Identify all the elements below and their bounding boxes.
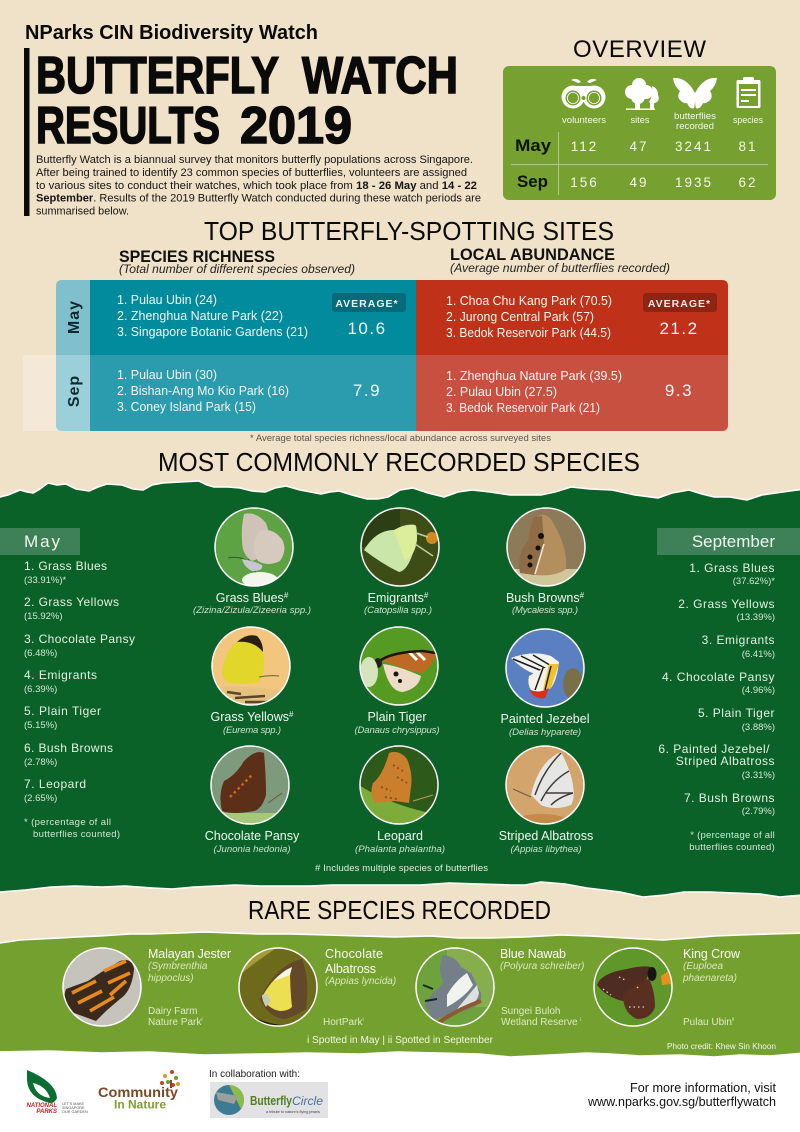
September list bbox=[657, 528, 800, 853]
rare species: Malayan Jester: (Symbrenthia bbox=[148, 961, 208, 972]
panel: top sites table bbox=[23, 280, 728, 431]
species card: Chocolate Pansy bbox=[205, 745, 300, 855]
species footnote: # Includes multiple species of butterflies bbox=[315, 863, 488, 874]
species card: Leopard: (Phalanta phalantha) bbox=[355, 844, 445, 855]
rare species: Malayan Jester: Malayan Jester bbox=[148, 947, 231, 961]
rare species: Chocolate Albatross: Chocolate bbox=[325, 947, 383, 961]
overview heading: OVERVIEW bbox=[573, 36, 706, 63]
September list: (3.31%) bbox=[742, 770, 775, 781]
species card: Leopard: Leopard bbox=[377, 829, 423, 843]
species card: Bush Browns bbox=[506, 507, 586, 616]
May list: May bbox=[24, 532, 60, 551]
species card: Emigrants: (Catopsilia spp.) bbox=[364, 605, 432, 616]
heading: rare species: RARE SPECIES RECORDED bbox=[248, 895, 551, 925]
column heading: species richness: SPECIES RICHNESS bbox=[119, 248, 275, 266]
column labels bbox=[562, 111, 763, 132]
main title: WATCH bbox=[302, 47, 458, 105]
month label: May: May bbox=[66, 300, 83, 334]
richness May list bbox=[117, 292, 308, 339]
logo: National Parks: LET'S MAKE bbox=[62, 1102, 85, 1106]
average values: 7.9 bbox=[353, 381, 381, 400]
abundance Sep list: 1. Zhenghua Nature Park (39.5) bbox=[446, 368, 622, 383]
May list: 2. Grass Yellows bbox=[24, 595, 119, 609]
rare species: Blue Nawab: i bbox=[580, 1017, 581, 1023]
May list: 5. Plain Tiger bbox=[24, 704, 101, 718]
main title: 2019 bbox=[240, 97, 352, 155]
logo: ButterflyCircle: a tribute to nature's flying jewels bbox=[266, 1110, 320, 1114]
row: Sep: 156 bbox=[570, 175, 599, 190]
rare species: Blue Nawab: Blue Nawab bbox=[500, 947, 566, 961]
abundance May list: 3. Bedok Reservoir Park (44.5) bbox=[446, 325, 611, 340]
species card: Plain Tiger: (Danaus chrysippus) bbox=[354, 725, 440, 736]
average badge: richness bbox=[332, 293, 406, 312]
May list: (2.78%) bbox=[24, 757, 57, 768]
September list: (3.88%) bbox=[742, 722, 775, 733]
rare species: Blue Nawab: Wetland Reserve bbox=[501, 1017, 578, 1028]
rare species: Chocolate Albatross: i bbox=[362, 1017, 364, 1023]
panel: overview bbox=[503, 66, 776, 200]
rare species: King Crow: Pulau Ubin bbox=[683, 1017, 732, 1028]
more information: For more information, visit bbox=[630, 1080, 776, 1095]
May list: (33.91%)* bbox=[24, 575, 67, 586]
column heading: species richness: (Total number of different species observed) bbox=[119, 264, 355, 276]
average values: 21.2 bbox=[659, 319, 699, 338]
species card: Emigrants: # bbox=[424, 591, 429, 600]
species card: Grass Yellows: (Eurema spp.) bbox=[223, 725, 281, 736]
rare species: Chocolate Albatross bbox=[238, 947, 396, 1028]
rare species: Chocolate Albatross: (Appias lyncida) bbox=[325, 976, 396, 987]
icon: clipboard bbox=[736, 77, 760, 108]
species card: Emigrants: Emigrants bbox=[368, 591, 424, 605]
more information: www.nparks.gov.sg/butterflywatch bbox=[587, 1094, 776, 1109]
intro paragraph bbox=[36, 154, 481, 218]
rare species: Chocolate Albatross: Albatross bbox=[325, 962, 376, 976]
logo: National Parks: NATIONAL bbox=[26, 1103, 57, 1109]
row: May: 47 bbox=[629, 139, 649, 154]
supertitle: NParks CIN Biodiversity Watch bbox=[25, 22, 318, 44]
species card: Chocolate Pansy: Chocolate Pansy bbox=[205, 829, 300, 843]
abundance Sep list bbox=[446, 368, 622, 415]
main title: RESULTS bbox=[36, 97, 220, 155]
rare species: Malayan Jester bbox=[62, 947, 231, 1028]
rare species: Malayan Jester: hippoclus) bbox=[148, 973, 194, 984]
rare species: Chocolate Albatross: HortPark bbox=[323, 1017, 362, 1028]
May list: butterflies counted) bbox=[33, 829, 120, 840]
average values: 10.6 bbox=[347, 319, 387, 338]
September list: * (percentage of all bbox=[690, 830, 775, 841]
species card: Painted Jezebel: Painted Jezebel bbox=[501, 712, 589, 726]
average values bbox=[347, 319, 699, 400]
column labels: species bbox=[733, 115, 763, 126]
logo: Community in Nature bbox=[98, 1070, 180, 1112]
heading: top sites: TOP BUTTERFLY-SPOTTING SITES bbox=[204, 216, 614, 246]
intro paragraph: September. Results of the 2019 Butterfly Watch conducted during these watch periods are bbox=[36, 192, 481, 204]
rare species: King Crow bbox=[593, 947, 741, 1028]
white footer background and rare species band bbox=[0, 932, 800, 1132]
species card: Grass Blues: Grass Blues bbox=[216, 591, 284, 605]
May list: 4. Emigrants bbox=[24, 668, 97, 682]
September list: (6.41%) bbox=[742, 649, 775, 660]
column heading: local abundance: (Average number of butterflies recorded) bbox=[450, 263, 670, 275]
species card: Plain Tiger: Plain Tiger bbox=[367, 710, 427, 724]
rare species: Blue Nawab: (Polyura schreiber) bbox=[500, 961, 584, 972]
logo: ButterflyCircle: Circle bbox=[292, 1094, 323, 1108]
species card: Grass Yellows: # bbox=[289, 710, 294, 719]
May list bbox=[0, 528, 135, 840]
May list: (5.15%) bbox=[24, 720, 57, 731]
row: Sep: 1935 bbox=[675, 175, 713, 190]
May list: (15.92%) bbox=[24, 611, 63, 622]
icon: binoculars bbox=[562, 79, 606, 108]
row: May bbox=[515, 136, 758, 155]
logo: National Parks: PARKS bbox=[36, 1109, 57, 1115]
column labels: butterflies bbox=[674, 111, 716, 122]
species card: Striped Albatross: Striped Albatross bbox=[499, 829, 593, 843]
September list: 3. Emigrants bbox=[702, 633, 775, 647]
September list: 2. Grass Yellows bbox=[678, 597, 775, 611]
May list: 1. Grass Blues bbox=[24, 559, 107, 573]
September list: (37.62%)* bbox=[733, 576, 775, 587]
species card: Grass Yellows bbox=[211, 626, 294, 736]
icon: butterfly bbox=[673, 78, 717, 108]
species card: Emigrants bbox=[360, 507, 440, 616]
average badge: abundance bbox=[643, 293, 717, 312]
header block bbox=[24, 22, 481, 218]
rare species: King Crow: phaenareta) bbox=[682, 973, 737, 984]
row: Sep: Sep bbox=[517, 172, 548, 191]
row: May: 112 bbox=[571, 139, 598, 154]
September list: 5. Plain Tiger bbox=[698, 706, 775, 720]
species card: Plain Tiger bbox=[354, 626, 440, 736]
rare species: Malayan Jester: i bbox=[201, 1017, 202, 1023]
logo: National Parks: OUR GARDEN bbox=[62, 1110, 88, 1114]
rare species: Blue Nawab bbox=[415, 947, 584, 1028]
row: May: 3241 bbox=[675, 139, 713, 154]
column heading: local abundance: LOCAL ABUNDANCE bbox=[450, 246, 615, 264]
main title bbox=[36, 47, 458, 155]
richness Sep list bbox=[117, 367, 289, 414]
richness Sep list: 2. Bishan-Ang Mo Kio Park (16) bbox=[117, 383, 289, 398]
September list: 6. Painted Jezebel/ bbox=[658, 742, 770, 756]
richness May list: 3. Singapore Botanic Gardens (21) bbox=[117, 324, 308, 339]
September list: (4.96%) bbox=[742, 685, 775, 696]
species card: Chocolate Pansy: (Junonia hedonia) bbox=[214, 844, 290, 855]
species card: Painted Jezebel: (Delias hyparete) bbox=[509, 727, 581, 738]
species card: Striped Albatross bbox=[499, 745, 593, 855]
richness Sep list: 1. Pulau Ubin (30) bbox=[117, 367, 217, 382]
richness May list: 1. Pulau Ubin (24) bbox=[117, 292, 217, 307]
table footnote: * Average total species richness/local abundance across surveyed sites bbox=[250, 433, 551, 444]
species card: Grass Blues: # bbox=[284, 591, 289, 600]
May list: 3. Chocolate Pansy bbox=[24, 632, 135, 646]
species card: Bush Browns: # bbox=[580, 591, 585, 600]
September list: September bbox=[692, 532, 775, 551]
panel: most commonly recorded species band bbox=[0, 481, 800, 897]
richness Sep list: 3. Coney Island Park (15) bbox=[117, 399, 256, 414]
September list: Striped Albatross bbox=[676, 754, 775, 768]
column heading: species richness bbox=[119, 248, 355, 276]
average badge: abundance: AVERAGE* bbox=[648, 298, 711, 310]
month label: Sep: Sep bbox=[66, 375, 83, 407]
logo: National Parks bbox=[26, 1070, 88, 1115]
intro paragraph: to various sites to conduct their watches, which took place from 18 - 26 May and 14 - 22 bbox=[36, 180, 477, 192]
intro paragraph: Butterfly Watch is a biannual survey that monitors butterfly populations across Singapore. bbox=[36, 154, 473, 166]
icon: trees bbox=[625, 78, 659, 110]
row: Sep: 49 bbox=[629, 175, 649, 190]
title accent bar bbox=[24, 48, 30, 216]
rare species: Malayan Jester: Nature Park bbox=[148, 1017, 201, 1028]
row: May: 81 bbox=[738, 139, 758, 154]
September list: 4. Chocolate Pansy bbox=[662, 670, 775, 684]
September list: (13.39%) bbox=[736, 612, 775, 623]
logo: National Parks: SINGAPORE bbox=[62, 1106, 85, 1110]
more information bbox=[587, 1080, 776, 1109]
intro paragraph: summarised below. bbox=[36, 206, 129, 218]
rare species: King Crow: King Crow bbox=[683, 947, 741, 961]
column labels: recorded bbox=[676, 121, 714, 132]
average values: 9.3 bbox=[665, 381, 693, 400]
species card: Grass Blues: (Zizina/Zizula/Zizeeria spp.) bbox=[193, 605, 311, 616]
September list: 1. Grass Blues bbox=[689, 561, 775, 575]
abundance Sep list: 2. Pulau Ubin (27.5) bbox=[446, 384, 557, 399]
September list: 7. Bush Browns bbox=[684, 791, 775, 805]
column labels: sites bbox=[630, 115, 650, 126]
abundance May list: 2. Jurong Central Park (57) bbox=[446, 309, 594, 324]
table dividers bbox=[511, 132, 768, 195]
collaboration label: In collaboration with: bbox=[209, 1069, 300, 1080]
rare species: Malayan Jester: Dairy Farm bbox=[148, 1006, 197, 1017]
logo: Community in Nature: Community bbox=[98, 1084, 178, 1100]
logo: ButterflyCircle: Butterfly bbox=[250, 1094, 292, 1108]
May list: (2.65%) bbox=[24, 793, 57, 804]
species card: Leopard bbox=[355, 745, 445, 855]
species card: Bush Browns: Bush Browns bbox=[506, 591, 580, 605]
logo: Community in Nature: In Nature bbox=[114, 1100, 166, 1112]
species card: Striped Albatross: (Appias libythea) bbox=[510, 844, 582, 855]
species card: Grass Blues bbox=[193, 507, 311, 616]
May list: 6. Bush Browns bbox=[24, 741, 113, 755]
abundance Sep list: 3. Bedok Reservoir Park (21) bbox=[446, 400, 600, 415]
intro paragraph: After being trained to identify 23 common species of butterflies, volunteers are assigned bbox=[36, 167, 467, 179]
column heading: local abundance bbox=[450, 246, 670, 275]
row: May: May bbox=[515, 136, 552, 155]
species card: Grass Yellows: Grass Yellows bbox=[211, 710, 289, 724]
rare species: King Crow: ii bbox=[732, 1017, 734, 1023]
species card: Painted Jezebel bbox=[501, 628, 589, 738]
column labels: volunteers bbox=[562, 115, 606, 126]
logo: ButterflyCircle bbox=[210, 1082, 328, 1118]
richness May list: 2. Zhenghua Nature Park (22) bbox=[117, 308, 283, 323]
September list: (2.79%) bbox=[742, 806, 775, 817]
heading: most common species: MOST COMMONLY RECORDED SPECIES bbox=[158, 447, 640, 477]
May list: (6.48%) bbox=[24, 648, 57, 659]
abundance May list: 1. Choa Chu Kang Park (70.5) bbox=[446, 293, 612, 308]
September list: butterflies counted) bbox=[689, 842, 775, 853]
May list: 7. Leopard bbox=[24, 777, 86, 791]
abundance May list bbox=[446, 293, 612, 340]
May list: * (percentage of all bbox=[24, 817, 111, 828]
rare species: Blue Nawab: Sungei Buloh bbox=[501, 1006, 560, 1017]
photo credit: Photo credit: Khew Sin Khoon bbox=[667, 1041, 776, 1051]
rare species key: i Spotted in May | ii Spotted in September bbox=[307, 1034, 493, 1046]
rare species: King Crow: (Euploea bbox=[683, 961, 723, 972]
species card: Bush Browns: (Mycalesis spp.) bbox=[512, 605, 578, 616]
May list: (6.39%) bbox=[24, 684, 57, 695]
main title: BUTTERFLY bbox=[36, 47, 279, 105]
average badge: richness: AVERAGE* bbox=[335, 298, 399, 310]
row: Sep bbox=[517, 172, 758, 191]
row: Sep: 62 bbox=[738, 175, 758, 190]
